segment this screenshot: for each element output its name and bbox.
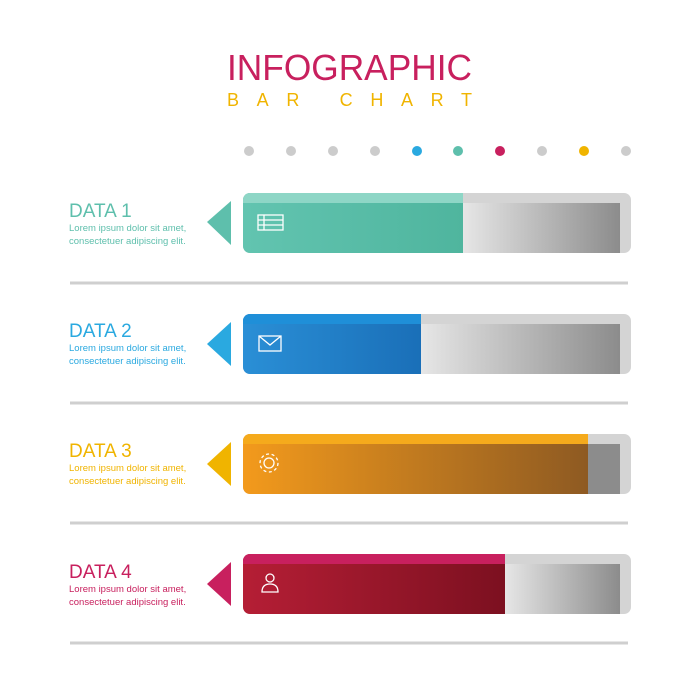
label: data 1 xyxy=(69,201,186,247)
arrow: data 2 xyxy=(207,322,231,366)
icon: envelope xyxy=(259,336,281,351)
row: data 3 xyxy=(69,434,631,494)
row: data 1 xyxy=(69,193,631,253)
arrow: data 4 xyxy=(207,562,231,606)
label: data 4 xyxy=(69,562,186,608)
label: data 3 xyxy=(69,441,186,487)
icon: gear xyxy=(260,454,278,472)
dot row xyxy=(244,146,631,156)
arrow: data 1 xyxy=(207,201,231,245)
icon: list xyxy=(258,215,283,230)
row: data 2 xyxy=(69,314,631,374)
title: INFOGRAPHIC xyxy=(227,47,472,88)
bar: data 3 xyxy=(243,434,631,494)
subtitle: BAR CHART xyxy=(227,90,472,110)
label: data 3: Lorem ipsum dolor sit amet, xyxy=(69,463,186,474)
bar: data 2 xyxy=(243,314,631,374)
label: data 2: DATA 2 xyxy=(69,321,132,342)
label: data 4: DATA 4 xyxy=(69,562,132,583)
bar: data 1 xyxy=(243,193,631,253)
label: data 2: Lorem ipsum dolor sit amet, xyxy=(69,343,186,354)
label: data 3: DATA 3 xyxy=(69,441,132,462)
label: data 1: consectetuer adipiscing elit. xyxy=(69,236,186,247)
label: data 2 xyxy=(69,321,186,367)
label: data 1: DATA 1 xyxy=(69,201,132,222)
label: data 3: consectetuer adipiscing elit. xyxy=(69,476,186,487)
bar: data 4 xyxy=(243,554,631,614)
label: data 4: consectetuer adipiscing elit. xyxy=(69,597,186,608)
icon: person xyxy=(262,574,278,592)
arrow: data 3 xyxy=(207,442,231,486)
label: data 1: Lorem ipsum dolor sit amet, xyxy=(69,223,186,234)
label: data 2: consectetuer adipiscing elit. xyxy=(69,356,186,367)
row: data 4 xyxy=(69,554,631,614)
label: data 4: Lorem ipsum dolor sit amet, xyxy=(69,584,186,595)
